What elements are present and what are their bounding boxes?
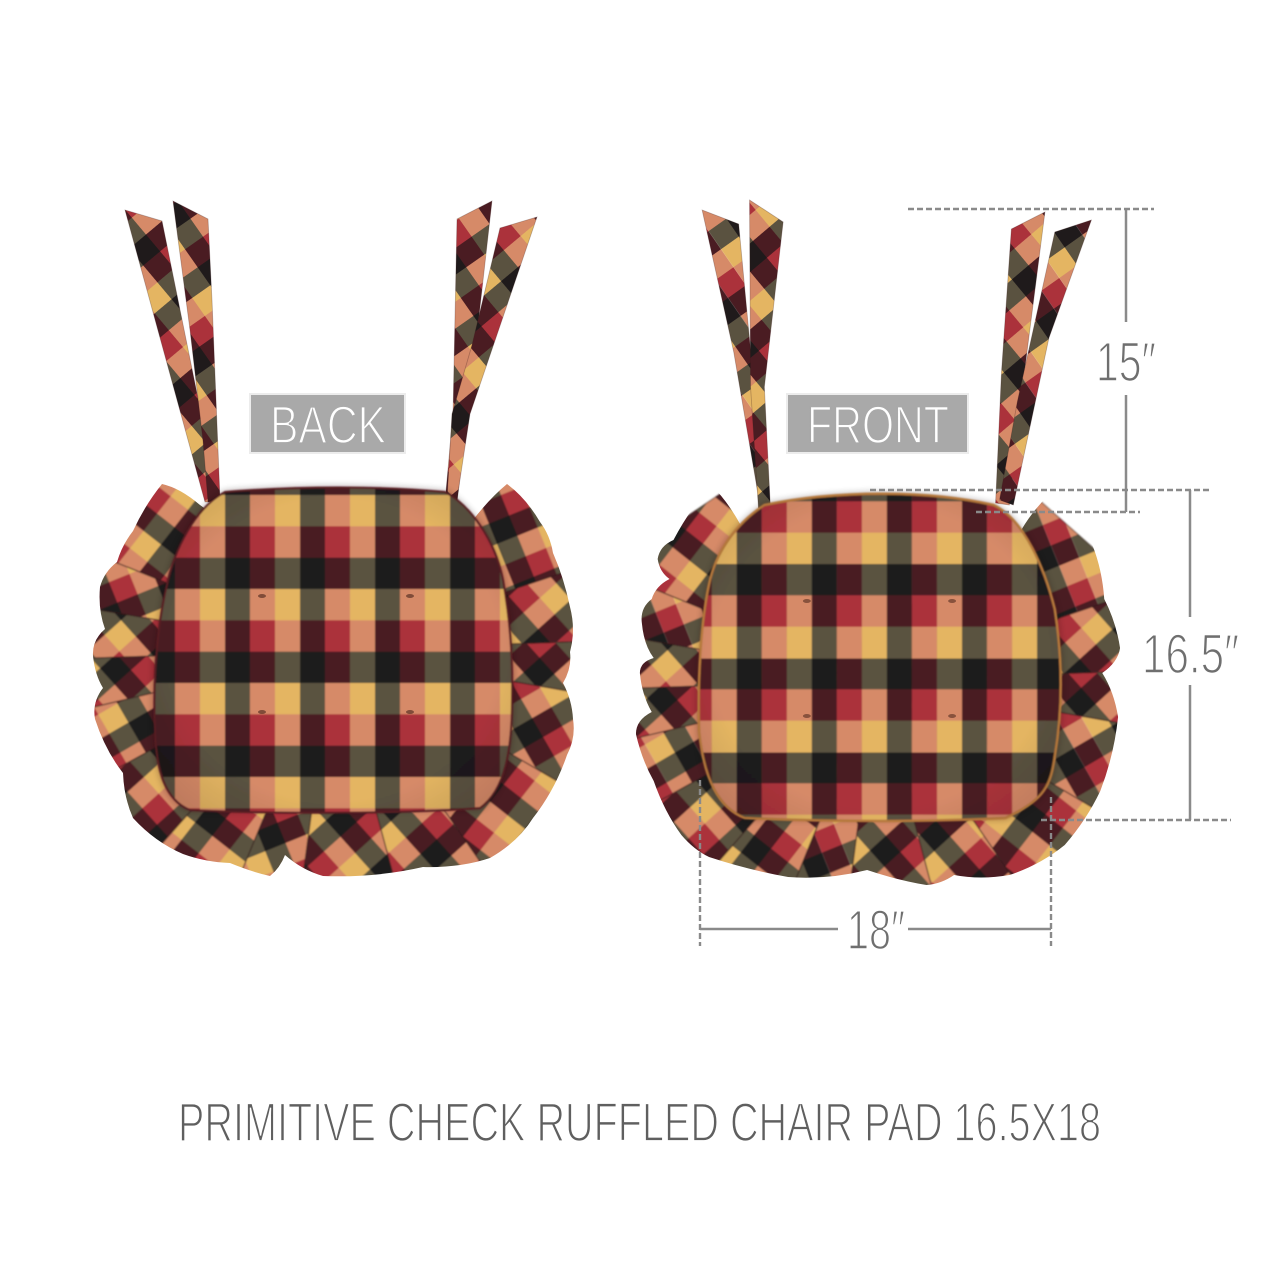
dimension: pad width 18 inches	[700, 780, 1051, 961]
label: FRONT: FRONT	[807, 396, 949, 455]
dimension: pad depth 16.5 inches	[870, 490, 1239, 820]
panel: front view chair pad	[636, 199, 1120, 885]
dimension: pad width 18 inches: 18″	[847, 898, 905, 961]
front pad shadow	[699, 494, 1061, 818]
back ruffle	[92, 484, 574, 876]
back pad shadow	[154, 488, 512, 810]
dimension: pad depth 16.5 inches: 16.5″	[1142, 622, 1239, 685]
front tie straps	[702, 200, 1091, 508]
dimension: tie length 15 inches: 15″	[1096, 330, 1156, 393]
back tufts	[258, 594, 414, 714]
panel: back view chair pad	[92, 200, 574, 876]
front tufts	[803, 599, 956, 718]
front pad	[699, 494, 1061, 821]
front ruffle	[636, 493, 1120, 885]
dimension: tie length 15 inches	[908, 209, 1156, 512]
back tie straps	[125, 201, 537, 502]
back pad	[154, 488, 512, 813]
label: BACK: BACK	[270, 396, 386, 455]
